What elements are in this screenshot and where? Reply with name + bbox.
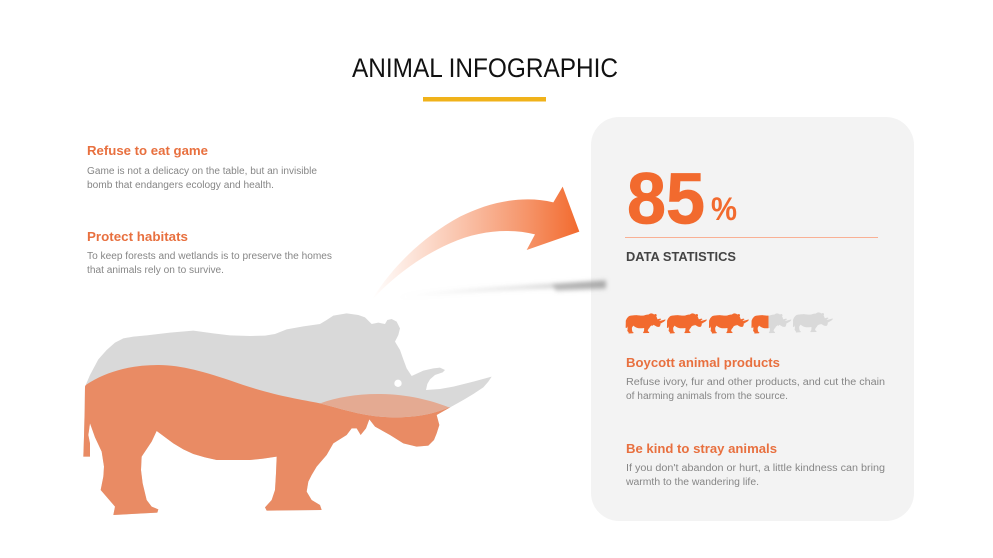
- text block: refuse to eat game: Refuse to eat game: [87, 143, 208, 158]
- statistics label: DATA STATISTICS: [626, 249, 736, 264]
- panel: statistics card: [591, 117, 914, 521]
- text block: be kind to stray animals: Be kind to stray animals: [626, 441, 777, 456]
- pictogram: rhino rating row: [626, 313, 832, 333]
- text block: protect habitats: [87, 229, 332, 276]
- text block: be kind to stray animals: [625, 441, 885, 488]
- text block: be kind to stray animals: warmth to the wandering life.: [625, 477, 759, 488]
- text block: protect habitats: that animals rely on to survive.: [87, 265, 224, 276]
- title: ANIMAL INFOGRAPHIC: [352, 53, 618, 83]
- text block: boycott animal products: Boycott animal products: [626, 355, 780, 370]
- text block: boycott animal products: [626, 355, 885, 402]
- divider line: [625, 237, 878, 238]
- arrow: [372, 187, 579, 300]
- text block: be kind to stray animals: If you don't abandon or hurt, a little kindness can bring: [626, 463, 885, 474]
- rhino illustration: [83, 313, 492, 515]
- arrow shadow: [393, 280, 606, 298]
- text block: refuse to eat game: [87, 143, 317, 191]
- big number 85%: 85: [627, 160, 705, 240]
- text block: boycott animal products: of harming animals from the source.: [626, 391, 788, 402]
- text block: refuse to eat game: bomb that endangers ecology and health.: [87, 180, 274, 191]
- big number 85%: %: [711, 191, 737, 227]
- text block: protect habitats: Protect habitats: [87, 229, 188, 244]
- text block: protect habitats: To keep forests and wetlands is to preserve the homes: [87, 251, 332, 262]
- text block: refuse to eat game: Game is not a delicacy on the table, but an invisible: [87, 166, 317, 177]
- text block: boycott animal products: Refuse ivory, fur and other products, and cut the chain: [626, 377, 885, 388]
- title underline: [423, 97, 546, 102]
